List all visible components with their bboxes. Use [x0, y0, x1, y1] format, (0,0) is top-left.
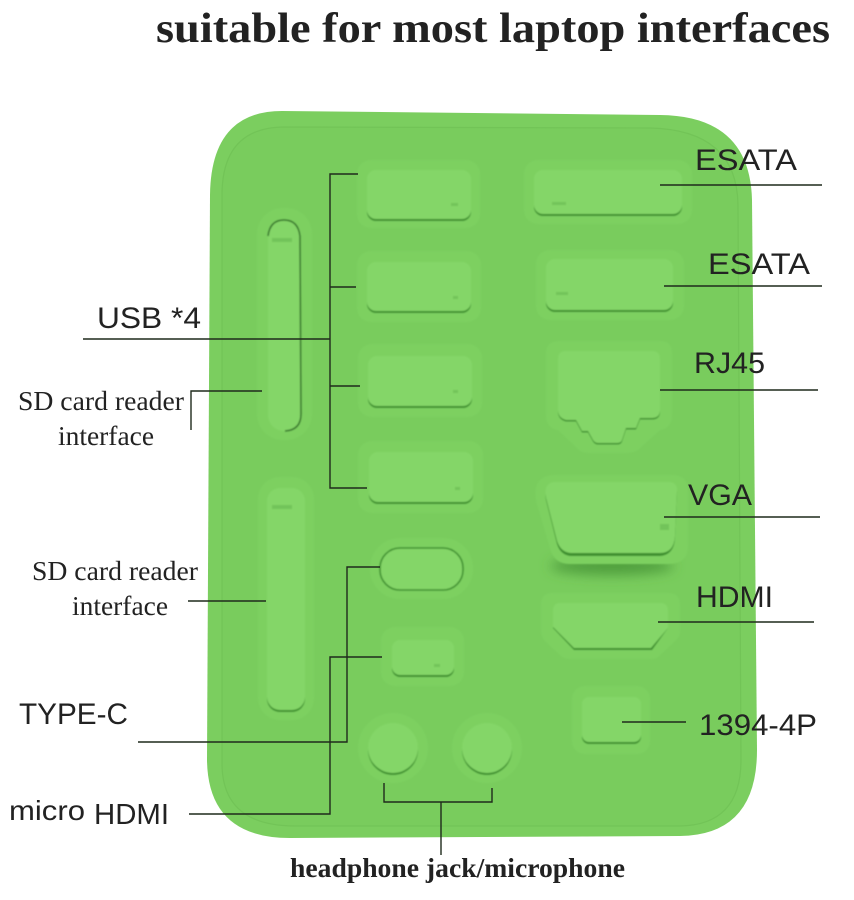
label: SD card reader lower: SD card reader — [32, 556, 198, 586]
label: RJ45: RJ45 — [694, 347, 765, 380]
micro HDMI plug — [370, 538, 473, 599]
USB plug 3 — [358, 344, 482, 417]
USB plug 1 — [357, 160, 480, 228]
label: ESATA second: ESATA — [708, 248, 810, 281]
audio plug right — [452, 713, 522, 783]
label: HDMI right: HDMI — [696, 581, 773, 614]
green silicone panel — [207, 111, 757, 838]
label: micro HDMI — [9, 795, 169, 831]
ESATA plug second — [536, 250, 684, 320]
label: SD card reader upper: SD card reader — [18, 386, 184, 416]
leader lines — [83, 174, 822, 855]
USB plug 4 — [358, 441, 483, 513]
label: VGA: VGA — [688, 479, 752, 512]
label: SD card reader upper — [18, 386, 184, 451]
label: SD card reader lower: interface — [72, 591, 168, 621]
label: ESATA top: ESATA — [695, 144, 797, 177]
label: micro HDMI: HDMI — [94, 799, 169, 831]
label: SD card reader upper: interface — [58, 421, 154, 451]
label: micro HDMI: micro — [9, 795, 85, 826]
label: headphone jack: headphone jack/microphone — [290, 853, 625, 883]
title: suitable for most laptop interfaces — [156, 6, 830, 52]
audio plug left — [358, 713, 428, 783]
ESATA plug top — [524, 160, 692, 224]
VGA plug — [536, 475, 688, 575]
TYPE-C plug — [381, 627, 464, 686]
label: SD card reader lower — [32, 556, 198, 621]
SD slot plug lower — [258, 477, 314, 720]
label: USB *4: USB *4 — [97, 302, 201, 335]
1394 plug — [572, 686, 650, 754]
label: 1394-4P: 1394-4P — [699, 709, 817, 742]
RJ45 plug — [546, 341, 672, 453]
SD slot plug upper — [257, 208, 312, 440]
label: TYPE-C: TYPE-C — [19, 698, 128, 731]
HDMI plug — [541, 593, 680, 659]
USB plug 2 — [357, 251, 481, 322]
